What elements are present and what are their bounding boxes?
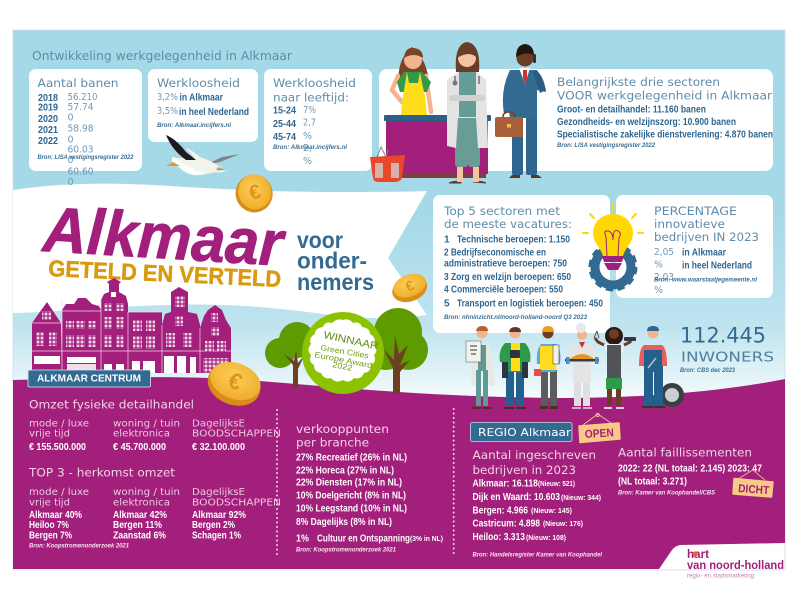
sign: open [579,414,620,442]
panel: unemployment by age: 45-74 [273,132,296,143]
panel: top 3 origin of turnover [28,466,281,550]
panel: sales points per branch: verkooppunten [296,422,389,436]
coin: top [232,171,277,216]
panel: top three sectors: VOOR werkgelegenheid in Alkmaar [557,88,772,102]
illustration: left tree [265,322,315,387]
panel: retail turnover [29,398,281,453]
panel: top 3 origin of turnover: Bergen 2% [192,520,235,531]
panel: top 5 vacancies: 3 Zorg en welzijn beroepen: 650 [444,272,571,283]
icon: shopping basket [370,147,405,182]
illustration: optician [466,326,495,408]
coin: large: € [225,367,246,396]
subtitle: geteld en verteld: GETELD EN VERTELD [48,255,282,292]
panel: top 3 origin of turnover: Alkmaar 42% [113,510,167,521]
stat: population: Bron: CBS dec 2023 [680,367,735,374]
panel: registered companies: (Nieuw: 344) [561,493,601,502]
panel: unemployment by age: 25-44 [273,119,296,130]
panel: number of jobs: 57.74 [68,102,94,113]
panel: innovative companies [616,195,773,298]
panel: sales points per branch: 10% Doelgericht (8% in NL) [296,490,406,501]
coin: banner right [388,270,431,307]
panel: innovative companies: in heel Nederland [682,261,752,272]
illustration: mechanic with tyre [639,326,684,407]
panel: number of jobs: 56.210 [68,92,98,103]
stat: population: INWONERS [681,350,774,366]
panel: unemployment by age: Werkloosheid [273,76,356,90]
sign: closed [733,470,773,497]
panel: number of jobs: 2022 [38,136,58,147]
panel: unemployment by age: % [303,131,312,142]
panel: top 3 origin of turnover: Alkmaar 40% [29,510,82,521]
logo: Hart van Noord-Holland: regio- en stadsmarketing [687,572,754,579]
coin: banner right: € [403,277,416,295]
panel: top 3 origin of turnover: Alkmaar 92% [192,510,246,521]
panel: number of jobs: 2019 [38,102,58,114]
panel: retail turnover: Omzet fysieke detailhandel [29,398,194,412]
panel: top 3 origin of turnover: Bergen 7% [29,531,72,542]
panel: top 3 origin of turnover: BOODSCHAPPEN [192,498,281,509]
badge: award winner [302,312,384,394]
stat: population: 112.445 [680,324,766,348]
panel: sales points per branch: 1% [296,534,309,545]
panel: unemployment: Bron: Alkmaar.incijfers.nl [157,122,231,129]
badge: award winner: WINNAAR [322,329,380,353]
stat: population [680,324,774,374]
panel: unemployment [148,69,258,142]
panel: bankruptcies: Aantal faillissementen [618,446,752,460]
panel: top three sectors: Bron: LISA vestigingsregister 2022 [557,142,655,149]
panel: innovative companies: % [654,260,663,271]
panel: top 3 origin of turnover: Bron: Koopstromenonderzoek 2021 [29,543,129,550]
badge: award winner: Europe Award [314,350,373,370]
label: Regio Alkmaar [470,422,572,442]
panel: number of jobs: 2021 [38,125,58,136]
panel: top 5 vacancies: administratieve beroepen: 750 [444,259,567,270]
panel: unemployment: 3,5% [157,106,178,117]
panel: top 3 origin of turnover: TOP 3 - herkomst omzet [28,466,176,480]
panel: registered companies: Bron: Handelsregister Kamer van Koophandel [472,552,602,559]
panel: retail turnover: vrije tijd [29,429,70,440]
panel: innovative companies: bedrijven IN 2023 [654,230,759,244]
panel: unemployment: Werkloosheid [157,76,240,90]
panel: top 5 vacancies: de meeste vacatures: [444,217,572,231]
panel: sales points per branch: 10% Leegstand (10% in NL) [296,504,407,515]
panel: top 3 origin of turnover: Heiloo 7% [29,520,69,531]
panel: unemployment: 3,2% [157,92,178,103]
panel: registered companies: Aantal ingeschreven [472,448,596,462]
logo: Hart van Noord-Holland: hart [687,547,709,561]
logo: Hart van Noord-Holland: van noord-holland [687,558,784,572]
panel: retail turnover: woning / tuin [113,419,180,430]
illustration: construction worker [534,326,560,409]
panel: top 3 origin of turnover: Bergen 11% [113,520,162,531]
panel: innovative companies: 2,05 [654,247,674,258]
panel: registered companies: Heiloo: 3.313 [472,532,525,543]
illustration: businessman with briefcase [495,44,546,178]
panel: registered companies: bedrijven in 2023 [472,463,576,477]
panel: innovative companies: in Alkmaar [682,248,726,259]
panel: retail turnover: € 45.700.000 [113,442,166,453]
coin: large [202,355,267,413]
panel: registered companies: (Nieuw: 176) [543,519,583,528]
panel: retail turnover: BOODSCHAPPEN [192,429,281,440]
panel: number of jobs: 58.98 [68,124,94,135]
panel: sales points per branch: 22% Diensten (17% in NL) [296,478,402,489]
label: Alkmaar Centrum: ALKMAAR CENTRUM [37,374,141,384]
panel: top three sectors: Belangrijkste drie sectoren [557,75,720,89]
panel: number of jobs: Aantal banen [38,76,118,90]
illustration: chef [565,323,599,408]
panel: bankruptcies: (NL totaal: 3.271) [618,476,687,487]
panel: retail turnover: elektronica [113,429,170,440]
panel: number of jobs: 0 [68,113,74,124]
panel: sales points per branch [296,422,443,554]
panel: retail turnover: € 32.100.000 [192,442,245,453]
panel: innovative companies: Bron: www.waarstaatjegemeente.nl [654,277,757,284]
panel: retail turnover: DagelijksE [192,419,245,430]
panel: top 3 origin of turnover: Schagen 1% [192,531,241,542]
panel: top 5 vacancies: 1 [444,235,450,246]
panel: top 5 vacancies: Top 5 sectoren met [443,204,561,218]
panel: sales points per branch: 27% Recreatief (26% in NL) [296,453,407,464]
panel: top 3 origin of turnover: elektronica [113,498,170,509]
panel: number of jobs: 0 [68,177,74,188]
panel: top three sectors: Groot- en detailhandel: 11.160 banen [557,105,706,116]
title: Alkmaar: Alkmaar [39,193,288,280]
panel: unemployment by age: naar leeftijd: [273,91,349,105]
panel: sales points per branch: Bron: Koopstromenonderzoek 2021 [296,547,396,554]
panel: innovative companies: innovatieve [654,217,725,231]
panel: top 5 vacancies: 2 Bedrijfseconomische en [444,248,546,259]
panel: top 3 origin of turnover: Zaanstad 6% [113,531,166,542]
panel: unemployment by age: 2,7 [303,118,316,129]
panel: top three sectors [379,69,773,171]
label: Regio Alkmaar: REGIO Alkmaar [478,426,572,439]
panel: top 5 vacancies: 4 Commerciële beroepen: 550 [444,285,563,296]
illustration: hairdresser [594,327,636,408]
panel: registered companies: Dijk en Waard: 10.603 [472,492,560,503]
illustration: right tree [366,308,428,394]
panel: number of jobs: Bron: LISA vestigingsregister 2022 [38,154,134,161]
panel: top three sectors: Gezondheids- en welzijnszorg: 10.900 banen [557,117,736,128]
panel: unemployment: in heel Nederland [179,107,249,118]
subtitle: voor ondernemers [297,227,374,295]
panel: unemployment by age [264,69,372,171]
heading: employment development: Ontwikkeling werkgelegenheid in Alkmaar [32,49,292,63]
illustration: doctor [447,42,488,183]
panel: sales points per branch: (3% in NL) [410,534,443,543]
logo: Hart van Noord-Holland [687,547,784,579]
panel: registered companies: Bergen: 4.966 [472,505,528,516]
badge: award winner: Green Cities [320,343,369,360]
panel: unemployment: in Alkmaar [180,92,223,104]
panel: top 3 origin of turnover: DagelijksE [192,487,245,498]
panel: sales points per branch: 8% Dagelijks (8% in NL) [296,517,392,528]
panel: innovative companies: 2,03 [654,272,674,283]
label: Alkmaar Centrum [28,370,150,387]
panel: bankruptcies: Bron: Kamer van Koophandel/CBS [618,490,716,497]
sign: closed: DICHT [738,483,770,497]
sign: open: OPEN [584,427,614,441]
panel: sales points per branch: Cultuur en Ontspanning [317,534,410,545]
panel: unemployment by age: 15-24 [273,106,296,116]
panel: top 3 origin of turnover: mode / luxe [29,487,89,498]
illustration: shop counter [384,115,491,178]
panel: top 5 vacancies: Transport en logistiek beroepen: 450 [457,299,603,310]
subtitle: voor ondernemers: nemers [297,269,374,295]
panel: registered companies [472,448,602,559]
panel: top 3 origin of turnover: woning / tuin [113,487,180,498]
panel: registered companies: Alkmaar: 16.118 [472,479,538,490]
panel: retail turnover: € 155.500.000 [29,442,86,453]
illustration: canal houses [31,278,231,373]
illustration: shop assistant [392,47,431,115]
badge: award winner: 2022 [332,360,354,373]
panel: number of jobs: 2018 [38,93,58,104]
coin: top: € [247,181,263,205]
panel: top 5 vacancies [433,195,610,333]
panel: top 5 vacancies: 5 [444,299,450,310]
subtitle: voor ondernemers: onder- [297,248,367,274]
panel: number of jobs: 60.03 [68,145,94,156]
panel: sales points per branch: per branche [296,436,369,450]
panel: number of jobs: 0 [68,135,74,146]
panel: registered companies: (Nieuw: 521) [538,479,575,488]
panel: unemployment by age: 7% [303,105,316,116]
panel: unemployment by age: Bron: Alkmaar.incijfers.nl [273,144,347,151]
icon: lightbulb with gear [583,204,643,289]
panel: retail turnover: mode / luxe [29,419,89,430]
panel: number of jobs [29,69,142,188]
panel: number of jobs: 2020 [38,114,58,125]
panel: innovative companies: % [654,285,663,296]
illustration: seagull [166,135,240,175]
panel: registered companies: (Nieuw: 108) [526,533,566,542]
panel: unemployment by age: 2, [303,143,312,154]
panel: top 3 origin of turnover: vrije tijd [29,498,70,509]
white banner [13,184,427,318]
subtitle: voor ondernemers: voor [297,227,343,253]
panel: registered companies: Castricum: 4.898 [472,519,540,530]
illustration: photographer [500,327,530,408]
panel: top 5 vacancies: Bron: nhninzicht.nl/noord-holland-noord Q3 2023 [444,314,587,321]
purple lower panel [13,377,785,569]
panel: bankruptcies [618,446,762,497]
panel: unemployment by age: % [303,156,312,167]
panel: innovative companies: PERCENTAGE [654,204,737,218]
panel: number of jobs: 60.60 [68,167,94,178]
panel: bankruptcies: 2022: 22 (NL totaal: 2.145) 2023: 47 [618,464,762,475]
panel: sales points per branch: 22% Horeca (27% in NL) [296,465,394,476]
panel: top 5 vacancies: Technische beroepen: 1.150 [457,235,570,246]
panel: number of jobs: 0 [68,155,74,166]
panel: registered companies: (Nieuw: 145) [531,506,572,515]
